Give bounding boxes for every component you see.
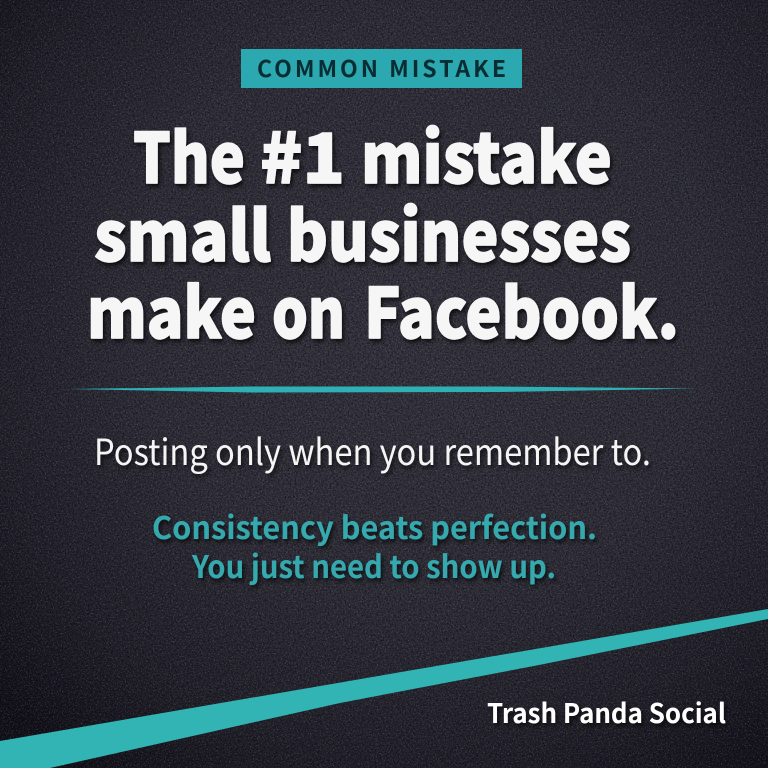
- title: mistake: [361, 103, 612, 203]
- title: small: [94, 181, 271, 281]
- teal takeaway: You just need to show up.: [191, 542, 556, 587]
- statement text: Posting only when you remember to.: [94, 424, 651, 476]
- title: Facebook.: [364, 258, 679, 358]
- brand name: Trash Panda Social: [487, 692, 726, 731]
- badge: common mistake: COMMON MISTAKE: [257, 50, 506, 84]
- title: businesses: [287, 181, 631, 281]
- teal takeaway: [152, 503, 597, 587]
- title: The: [133, 103, 245, 203]
- diagonal teal stripe: [0, 609, 768, 768]
- title: [87, 103, 679, 358]
- title: on: [272, 258, 345, 358]
- divider: [68, 386, 696, 392]
- title: make: [87, 258, 256, 358]
- teal takeaway: Consistency beats perfection.: [152, 503, 597, 548]
- title: #1: [260, 103, 345, 203]
